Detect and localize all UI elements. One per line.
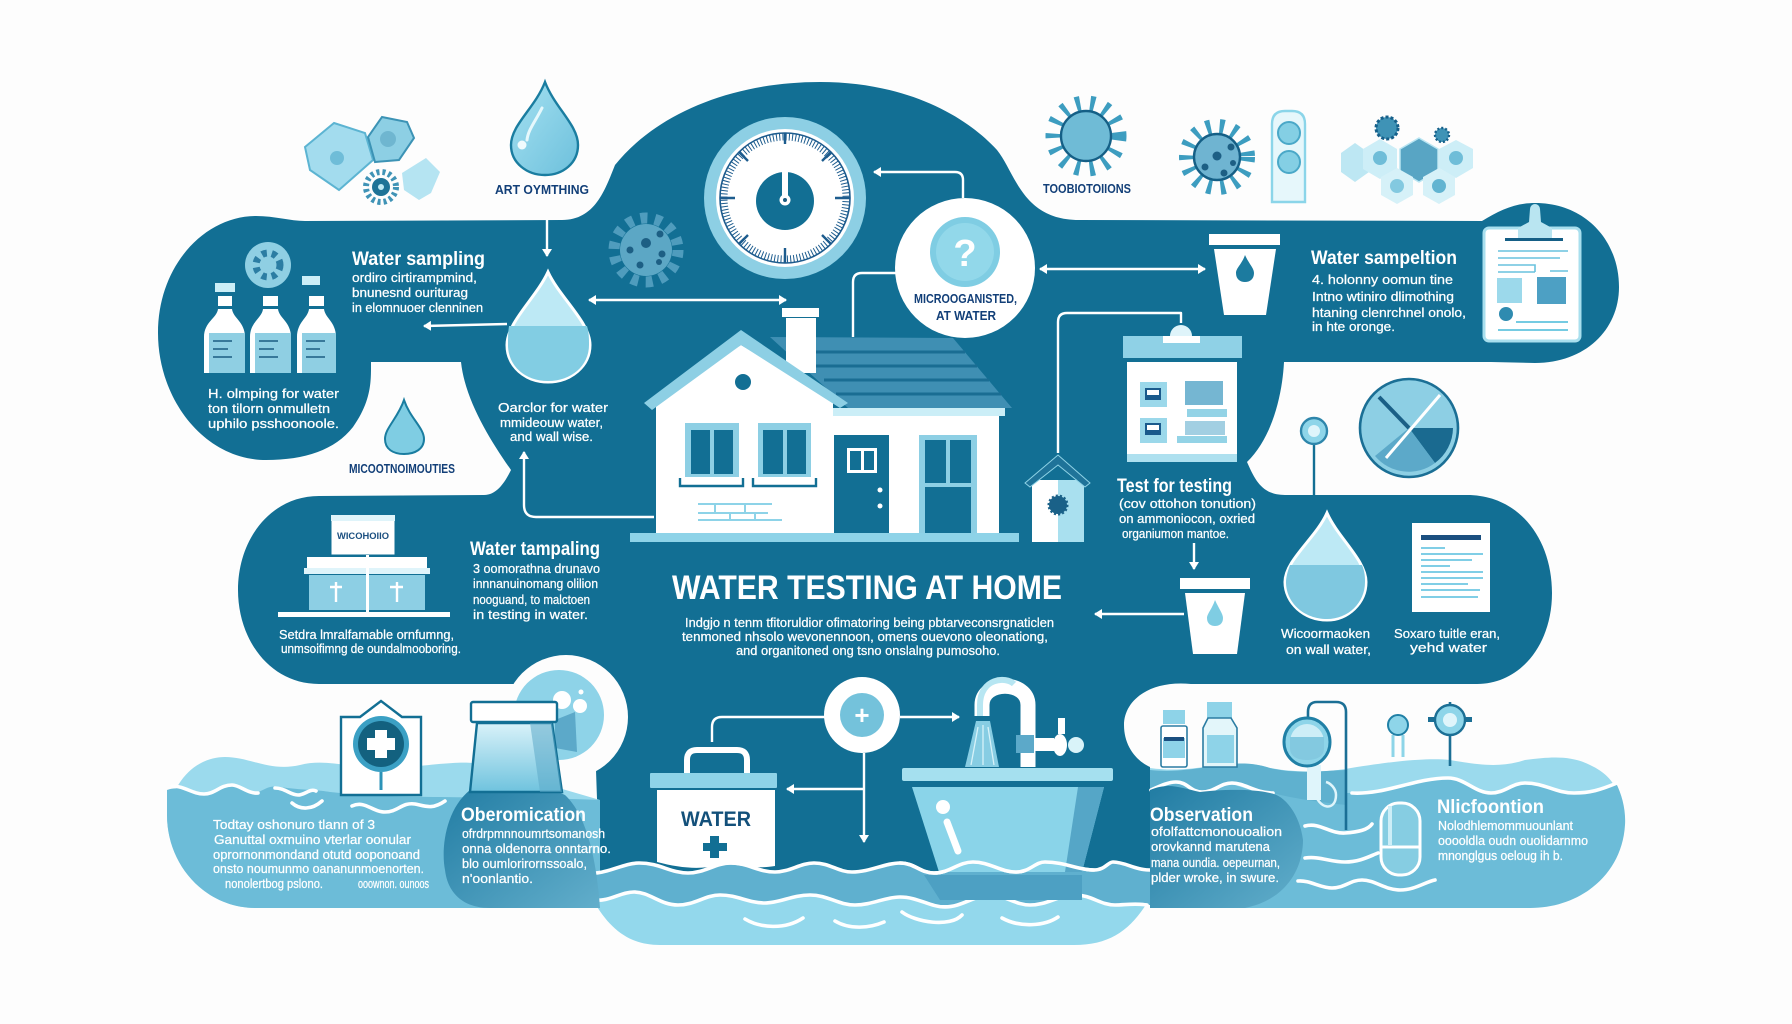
icon: house bbox=[630, 308, 1019, 542]
text: observation left: n'oonlantio. bbox=[462, 871, 533, 886]
arrow: circle to cup bbox=[1040, 268, 1205, 270]
text: right water panel: ooooldla oudn ouolidarnmo bbox=[1438, 833, 1588, 848]
text: observation right: ofolfattcmonouoalion bbox=[1151, 824, 1282, 839]
text: test for testing: (cov ottohon tonution) bbox=[1119, 496, 1256, 511]
text: observation left bbox=[461, 805, 611, 886]
panel: white circle behind jar bbox=[504, 655, 628, 779]
label: notch: MICOOTNOIMOUTIES bbox=[349, 462, 455, 476]
text: microorganism caption: Wicoormaoken bbox=[1281, 626, 1370, 641]
icon: small drop in notch bbox=[385, 400, 424, 454]
text: bottles caption bbox=[208, 386, 340, 431]
icon: clipboard bbox=[1484, 204, 1580, 341]
panel: right water section bbox=[1150, 758, 1625, 908]
text: left water panel bbox=[213, 817, 429, 891]
panel: centre water basin bbox=[593, 862, 1150, 945]
label: top left: ART OYMTHING bbox=[495, 183, 589, 197]
text: right water panel: Nlicfoontion bbox=[1437, 797, 1544, 818]
text: observation left: ofrdrpmnnoumrtsomanosh bbox=[462, 826, 605, 841]
text: supply kit caption: Setdra lmralfamable ornfumng, bbox=[279, 627, 454, 642]
icon: shield badge bbox=[341, 701, 421, 795]
text: right upper panel bbox=[1311, 248, 1466, 334]
icon: measuring dial bbox=[1360, 379, 1458, 477]
icon: supply kit bbox=[278, 515, 450, 617]
connector: small house to test kit bbox=[1058, 313, 1181, 453]
text: top left panel bbox=[352, 249, 485, 315]
panel: question circle: ? bbox=[953, 233, 977, 275]
text: observation right bbox=[1150, 805, 1282, 885]
panel: plus circle bbox=[824, 677, 900, 753]
icon: gauge dial bbox=[704, 117, 866, 279]
text: test for testing bbox=[1117, 476, 1256, 541]
text: lower left panel: 3 oomorathna drunavo bbox=[473, 561, 600, 576]
icon: magnifier probe bbox=[1284, 702, 1346, 830]
text: observation right: orovkannd marutena bbox=[1151, 839, 1271, 854]
text: right water panel bbox=[1437, 797, 1588, 863]
connector: circle to box bbox=[712, 717, 825, 742]
icon: capsule bbox=[1381, 803, 1420, 875]
label: top right: TOOBIOTOIIONS bbox=[1043, 182, 1131, 196]
panel: question circle: MICROOGANISTED, bbox=[914, 292, 1017, 306]
panel: question circle: AT WATER bbox=[936, 309, 996, 323]
text: microorganism caption: on wall water, bbox=[1286, 642, 1371, 657]
text: drop caption: and wall wise. bbox=[510, 429, 593, 444]
icon: pin left bbox=[1301, 418, 1327, 495]
text: bottles caption: H. olmping for water bbox=[208, 386, 340, 401]
text: supply kit caption: unmsoifimng de oundalmooboring. bbox=[281, 641, 461, 656]
icon: cup upper bbox=[1209, 234, 1280, 315]
icons: top right viruses bbox=[1053, 103, 1248, 188]
panel: question circle bbox=[895, 198, 1035, 338]
text: test for testing: organiumon mantoe. bbox=[1122, 526, 1229, 541]
text: right upper panel: Water sampeltion bbox=[1311, 248, 1457, 269]
text: left water panel: Ganuttal oxmuino vterlar oonular bbox=[214, 832, 412, 847]
text: test for testing: Test for testing bbox=[1117, 476, 1232, 497]
arrow: test text to cup bbox=[1193, 543, 1195, 569]
text: drop caption: mmideouw water, bbox=[500, 415, 603, 430]
connector: house to question circle bbox=[853, 273, 896, 337]
text: top left panel: in elomnuoer clenninen bbox=[352, 300, 483, 315]
text: top left panel: bnunesnd ouriturag bbox=[352, 285, 468, 300]
arrow: cup to title bbox=[1095, 613, 1184, 615]
icon: jar circle bbox=[514, 670, 604, 760]
icon: bottles bbox=[204, 242, 336, 373]
text: intro paragraph: and organitoned ong tsno onslalng pumosoho. bbox=[736, 643, 1000, 658]
icon: cup lower bbox=[1180, 578, 1250, 654]
icon: water first aid box bbox=[650, 750, 777, 868]
text: right upper panel: in hte oronge. bbox=[1312, 319, 1395, 334]
text: left water panel: ooownon. ounoos bbox=[358, 876, 429, 891]
arrow: house to drop text bbox=[524, 452, 654, 517]
text: observation right: mana oundia. oepeurnan, bbox=[1151, 855, 1280, 870]
text: right upper panel: htaning clenrchnel onolo, bbox=[1312, 305, 1466, 320]
text: observation right: Observation bbox=[1150, 805, 1253, 826]
icon: document bbox=[1412, 523, 1490, 612]
icon: top water drop bbox=[511, 82, 578, 175]
icon: small vials bbox=[1161, 702, 1237, 767]
text: intro paragraph: tenmoned nhsolo wevonennoon, omens ouevono oleonationg, bbox=[682, 629, 1048, 644]
arrow: question circle to gauge bbox=[874, 172, 963, 198]
text: bottles caption: uphilo psshoonoole. bbox=[208, 416, 339, 431]
text: lower left panel: Water tampaling bbox=[470, 539, 600, 560]
panel: plus circle: + bbox=[854, 700, 870, 730]
panel: observation bubble right bbox=[1150, 786, 1303, 908]
text: right water panel: Nolodhlemommuounlant bbox=[1438, 818, 1573, 833]
icon: hexagon molecules bbox=[1341, 117, 1473, 204]
icon: drop lower right bbox=[1285, 513, 1366, 620]
text: lower left panel: innnanuinomang olilion bbox=[473, 576, 598, 591]
text: lower left panel: nooguand, to malctoen bbox=[473, 592, 590, 607]
text: document caption bbox=[1394, 626, 1500, 655]
text: drop caption bbox=[498, 400, 609, 444]
icon: hexagon cells top left bbox=[305, 117, 440, 202]
arrow: circle down bbox=[863, 753, 865, 842]
text: right upper panel: 4. holonny oomun tine bbox=[1312, 272, 1453, 287]
arrow: drop to left text bbox=[424, 324, 507, 326]
arrow: circle to faucet bbox=[900, 716, 959, 718]
text: test for testing: on ammoniocon, oxried bbox=[1119, 511, 1255, 526]
text: document caption: Soxaro tuitle eran, bbox=[1394, 626, 1500, 641]
text: left water panel: onsto noumunmo oananunmoenorten. bbox=[213, 861, 424, 876]
text: left water panel: oprornonmondand otutd ooponoand bbox=[213, 847, 420, 862]
text: observation right: plder wroke, in swure. bbox=[1151, 870, 1279, 885]
text: observation left: onna oldenorra onntarno. bbox=[462, 841, 611, 856]
text: drop caption: Oarclor for water bbox=[498, 400, 609, 415]
text: supply kit caption bbox=[279, 627, 461, 656]
icon: central large drop bbox=[507, 272, 590, 382]
icon: supply kit: WICOHOIIO bbox=[337, 531, 389, 541]
icon: faucet and sink bbox=[900, 680, 1113, 900]
icon: virus in dark panel bbox=[614, 218, 678, 282]
text: lower left panel: in testing in water. bbox=[473, 607, 588, 622]
panel: main dark blue flow shape bbox=[158, 82, 1619, 885]
text: left water panel: Todtay oshonuro tlann of 3 bbox=[213, 817, 375, 832]
text: document caption: yehd water bbox=[1410, 640, 1488, 655]
text: microorganism caption bbox=[1281, 626, 1371, 657]
text: left water panel: nonolertbog pslono. bbox=[225, 876, 323, 891]
panel: observation bubble left bbox=[444, 785, 600, 908]
text: right water panel: mnonglgus oeloug ih b. bbox=[1438, 848, 1563, 863]
title: WATER TESTING AT HOME bbox=[672, 569, 1062, 607]
text: intro paragraph bbox=[682, 615, 1054, 658]
text: bottles caption: ton tilorn onmulletn bbox=[208, 401, 330, 416]
arrow: to box bbox=[787, 788, 864, 790]
text: right upper panel: Intno wtiniro dlimothing bbox=[1312, 289, 1454, 304]
icon: water first aid box: WATER bbox=[681, 808, 751, 831]
text: lower left panel bbox=[470, 539, 600, 622]
text: intro paragraph: Indgjo n tenm tfitoruldior ofimatoring being pbtarveconsrgnaticlen bbox=[685, 615, 1054, 630]
text: observation left: Oberomication bbox=[461, 805, 586, 826]
panel: left water section bbox=[167, 757, 600, 908]
icon: small house bbox=[1025, 455, 1090, 542]
icon: test kit bbox=[1123, 325, 1242, 462]
icon: jar bbox=[470, 702, 562, 792]
icon: test tube bbox=[1272, 111, 1305, 202]
arrow: label to drop bbox=[546, 220, 548, 256]
arrow: drop double arrow to gauge bbox=[589, 299, 786, 301]
icon: pins bbox=[1388, 702, 1472, 766]
text: top left panel: Water sampling bbox=[352, 249, 485, 270]
text: observation left: blo oumlorirornssoalo, bbox=[462, 856, 587, 871]
text: top left panel: ordiro cirtirampmind, bbox=[352, 270, 477, 285]
